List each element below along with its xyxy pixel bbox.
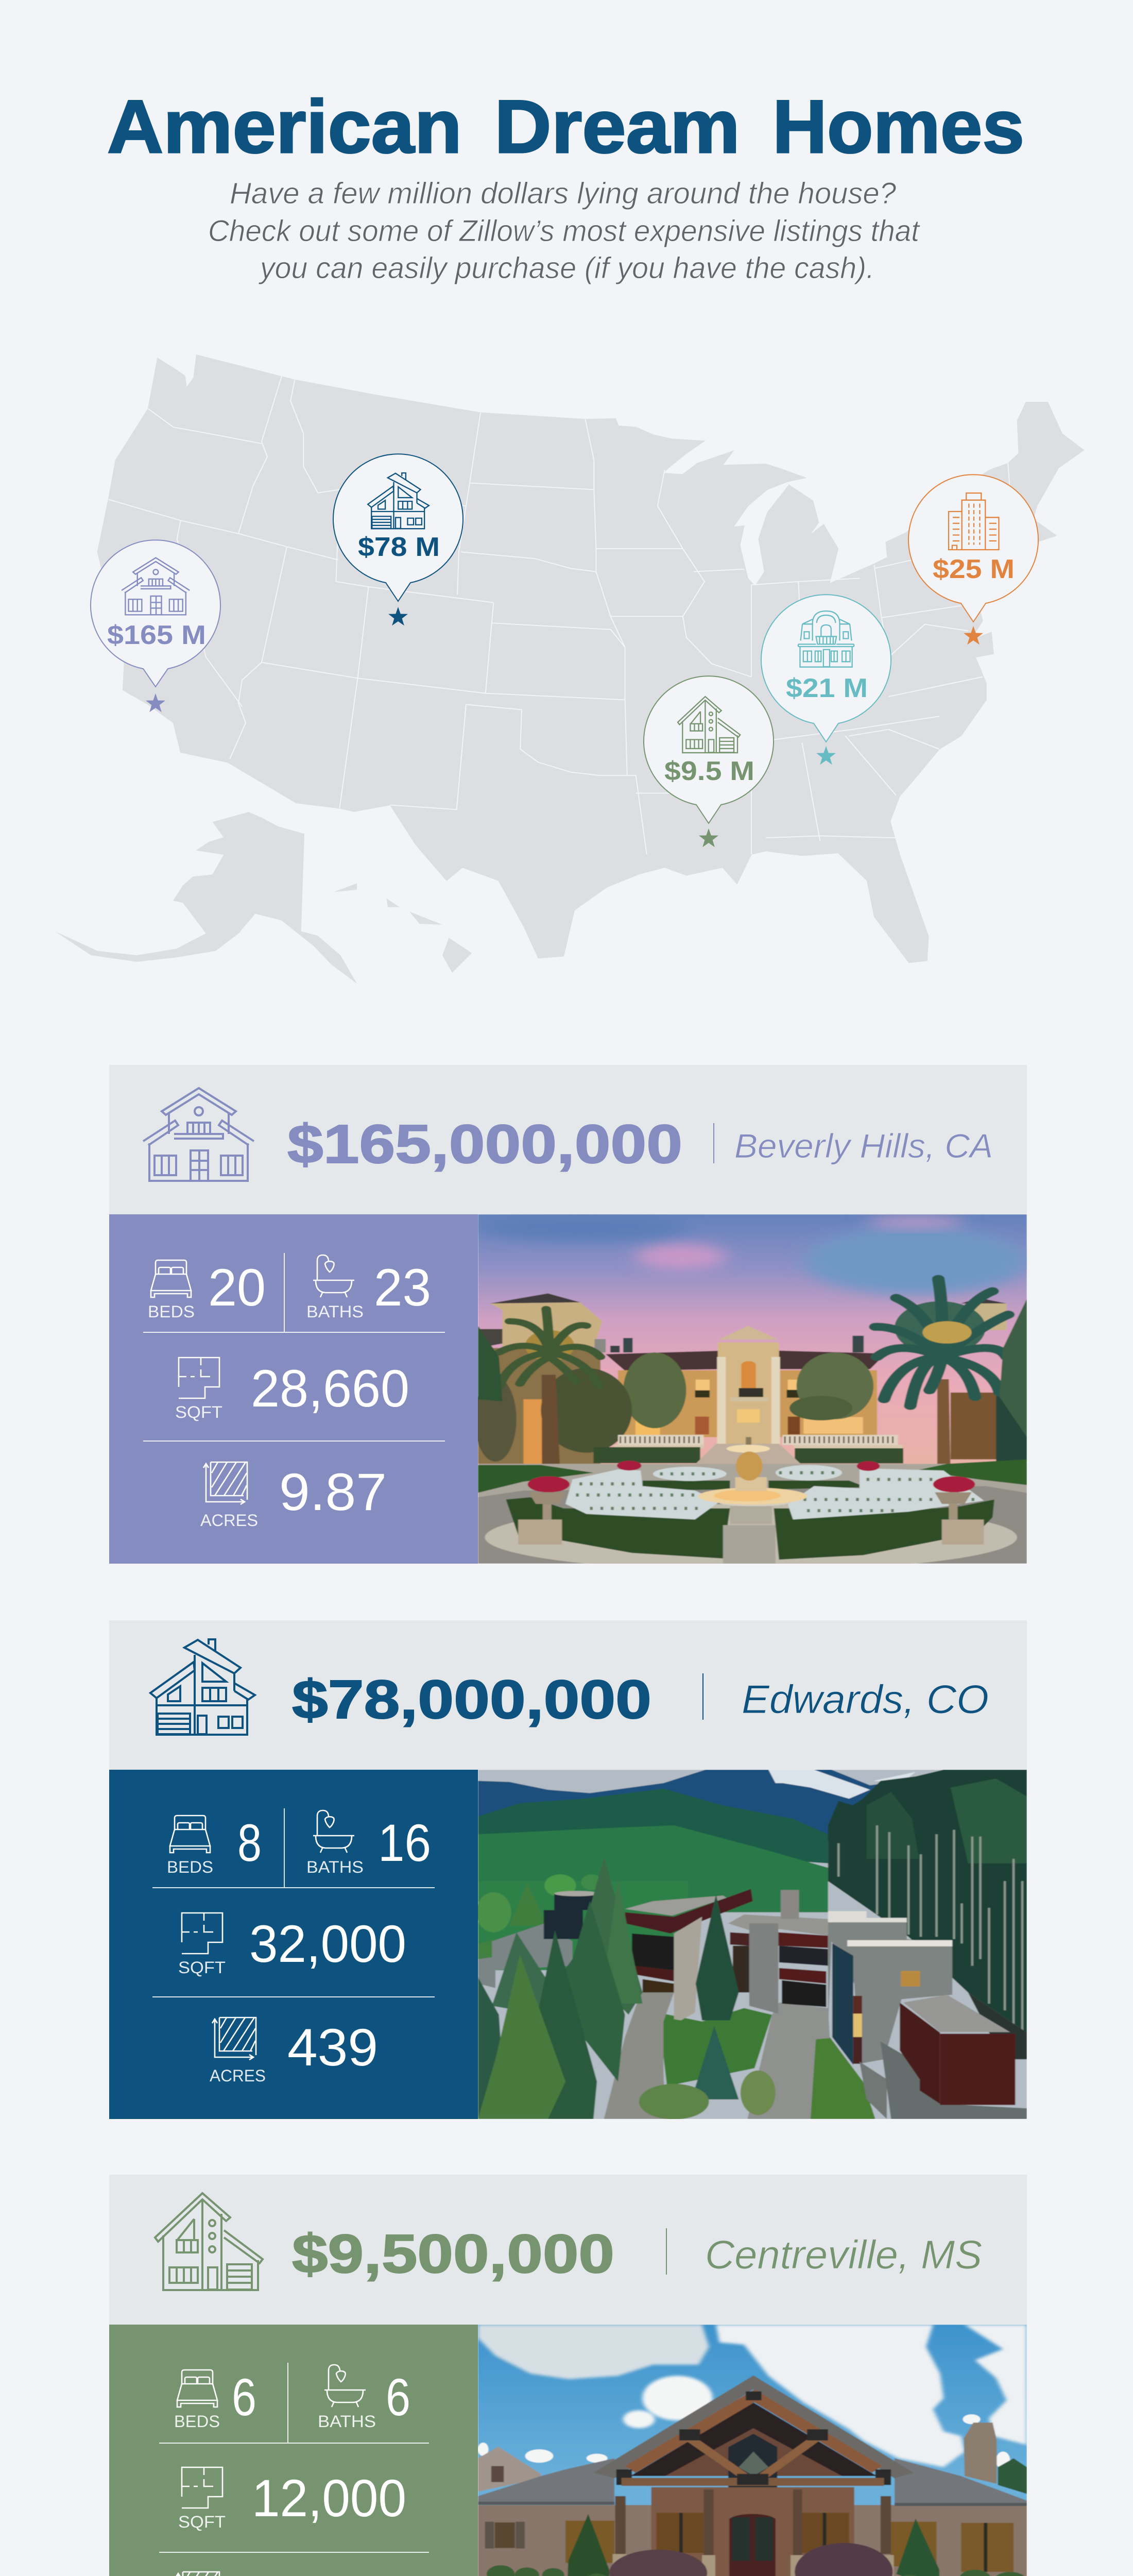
- sqft stat: SQFT: [178, 1958, 226, 1977]
- title: Dream: [494, 84, 740, 168]
- sqft stat: 28,660: [251, 1359, 409, 1418]
- title: American: [107, 84, 462, 168]
- pin: $25 M Philadelphia: [908, 474, 1038, 645]
- sqft stat: [178, 2467, 406, 2531]
- photo: Edwards mountain home: [476, 1770, 1027, 2120]
- price: $9,500,000: [292, 2224, 614, 2284]
- acres stat: ACRES: [200, 1511, 258, 1530]
- sqft stat: SQFT: [175, 1403, 222, 1421]
- photo: Beverly Hills estate at dusk: [474, 1214, 1027, 1571]
- sqft stat: 32,000: [249, 1914, 406, 1973]
- divider: [666, 2228, 667, 2275]
- card: Beverly Hills listing: [109, 1065, 1027, 1571]
- pin: $21 M Atlanta: [761, 595, 891, 765]
- header band: [109, 2175, 1027, 2325]
- beds stat: 6: [232, 2368, 256, 2427]
- acres stat: 9.87: [279, 1463, 387, 1521]
- map of the United States: [55, 355, 1084, 984]
- beds stat: BEDS: [167, 1858, 213, 1876]
- card: Edwards listing: [109, 1620, 1027, 2120]
- acres stat: [210, 2018, 378, 2085]
- sqft stat: SQFT: [178, 2513, 226, 2531]
- baths stat: [306, 1255, 431, 1321]
- sqft stat: [178, 1913, 406, 1977]
- icon: chalet: [150, 1639, 255, 1735]
- baths stat: [318, 2365, 410, 2431]
- card: Centreville listing: [109, 2175, 1027, 2576]
- beds stat: BEDS: [148, 1302, 195, 1321]
- pin: $21 M Atlanta: $21 M: [786, 673, 868, 703]
- beds stat: [167, 1814, 262, 1876]
- pin: $9.5 M Centreville: $9.5 M: [664, 756, 754, 786]
- divider: [713, 1123, 714, 1163]
- price: $165,000,000: [287, 1114, 682, 1175]
- subtitle text block: Check out some of Zillow’s most expensive listings that: [208, 214, 921, 248]
- beds stat: [148, 1258, 266, 1321]
- pin: $78 M Edwards: $78 M: [358, 532, 440, 562]
- beds stat: BEDS: [174, 2412, 220, 2431]
- baths stat: BATHS: [306, 1858, 364, 1876]
- subtitle text block: [208, 177, 921, 285]
- baths stat: 23: [374, 1258, 431, 1317]
- stats panel: [109, 2325, 478, 2576]
- sqft stat: 12,000: [252, 2469, 406, 2528]
- stats panel: [109, 1770, 478, 2119]
- baths stat: BATHS: [318, 2412, 376, 2431]
- pin: $9.5 M Centreville: [644, 676, 774, 847]
- divider: [702, 1673, 703, 1720]
- title: [107, 84, 1024, 168]
- subtitle text block: Have a few million dollars lying around the house?: [230, 177, 897, 210]
- pin: $78 M Edwards: [333, 454, 463, 625]
- photo: Centreville lodge: [478, 2325, 1027, 2576]
- price: $78,000,000: [292, 1669, 651, 1730]
- location: Edwards, CO: [742, 1676, 989, 1722]
- acres stat: ACRES: [210, 2066, 266, 2085]
- stats panel: [109, 1214, 478, 1564]
- acres stat: [200, 1462, 387, 1530]
- subtitle text block: you can easily purchase (if you have the cash).: [258, 251, 874, 285]
- location: Centreville, MS: [705, 2232, 982, 2277]
- beds stat: 8: [237, 1814, 262, 1872]
- baths stat: 6: [386, 2368, 410, 2427]
- acres stat: [173, 2572, 388, 2576]
- beds stat: 20: [208, 1258, 266, 1317]
- sqft stat: [175, 1358, 409, 1421]
- header band: [109, 1620, 1027, 1770]
- pin: $165 M Beverly Hills: [91, 540, 220, 712]
- baths stat: [306, 1810, 431, 1876]
- pin: $25 M Philadelphia: $25 M: [933, 554, 1015, 584]
- location: Beverly Hills, CA: [734, 1127, 993, 1165]
- baths stat: 16: [378, 1814, 431, 1872]
- icon: mansion: [143, 1088, 254, 1181]
- title: Homes: [772, 84, 1024, 168]
- pin: $165 M Beverly Hills: $165 M: [107, 620, 206, 650]
- icon: gabled house: [155, 2193, 263, 2290]
- baths stat: BATHS: [306, 1302, 364, 1321]
- beds stat: [174, 2368, 256, 2431]
- header band: [109, 1065, 1027, 1214]
- acres stat: 439: [287, 2018, 378, 2077]
